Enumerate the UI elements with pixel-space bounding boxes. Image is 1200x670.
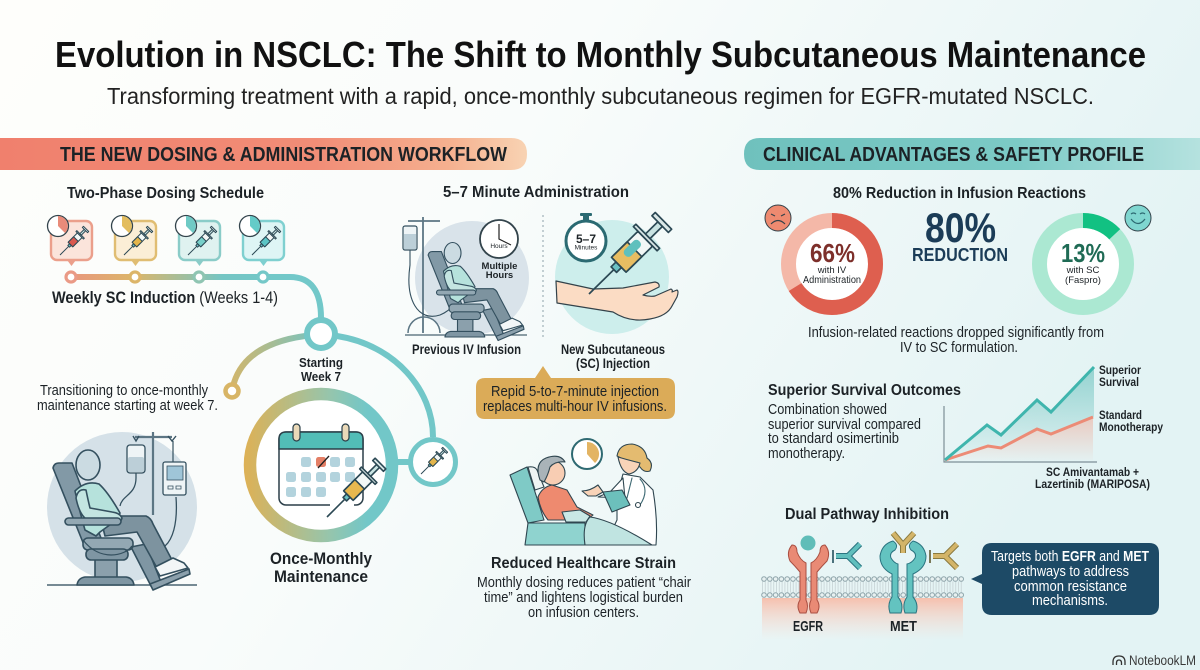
heading: two-phase dosing schedule: Two-Phase Dosing Schedule xyxy=(67,185,264,202)
text: transition note xyxy=(37,383,218,414)
heading: reduced healthcare strain: Reduced Healthcare Strain xyxy=(491,555,676,572)
label: standard monotherapy: Monotherapy xyxy=(1099,422,1164,434)
callout: rapid injection: replaces multi-hour IV infusions. xyxy=(483,399,667,415)
icon: week 4 dose card xyxy=(240,216,284,266)
panel: new dosing and administration workflow xyxy=(0,138,691,621)
stat: 80 percent reduction xyxy=(912,204,1008,265)
subtitle: Transforming treatment with a rapid, once-monthly subcutaneous regimen for EGFR-mutated NSCLC. xyxy=(107,83,1094,109)
chart: 13 percent SC donut: 13% xyxy=(1061,238,1105,268)
text: reaction summary: Infusion-related reactions dropped significantly from xyxy=(808,324,1104,341)
panel heading: workflow xyxy=(0,138,527,170)
label: once-monthly maintenance: Maintenance xyxy=(274,567,368,586)
stat: 80 percent reduction: 80% xyxy=(925,204,996,251)
callout: dual targeting: Targets both EGFR and MET xyxy=(991,548,1149,565)
label: chart axis regimen: Lazertinib (MARIPOSA) xyxy=(1035,477,1150,491)
callout: dual targeting xyxy=(971,543,1159,615)
label: once-monthly maintenance xyxy=(270,549,372,586)
text: survival description xyxy=(768,401,921,462)
label: starting week 7: Starting xyxy=(299,355,343,370)
panel: clinical advantages and safety profile xyxy=(744,138,1200,640)
label: superior survival: Survival xyxy=(1099,377,1139,389)
heading: superior survival outcomes: Superior Survival Outcomes xyxy=(768,382,961,399)
divider between IV and SC xyxy=(542,215,544,340)
icon: previous IV infusion illustration: Multiple xyxy=(482,261,517,272)
text: healthcare strain description: time” and lightens logistical burden xyxy=(484,589,683,606)
chart: 66 percent IV donut xyxy=(788,220,876,308)
icon: week 3 dose card xyxy=(176,216,220,266)
text: transition note: Transitioning to once-monthly xyxy=(40,383,209,399)
label: once-monthly maintenance: Once-Monthly xyxy=(270,549,372,568)
label: MET: MET xyxy=(890,618,917,635)
icon: previous IV infusion illustration xyxy=(403,217,529,340)
text: survival description: Combination showed xyxy=(768,401,887,418)
icon: sad face xyxy=(765,205,791,231)
chart: 13 percent SC donut: (Faspro) xyxy=(1065,275,1101,286)
text: reaction summary xyxy=(808,324,1104,356)
heading: 5-7 minute administration: 5–7 Minute Administration xyxy=(443,184,629,201)
icon: antibody bound to MET xyxy=(930,544,957,568)
icon: patient and clinician xyxy=(510,439,657,545)
panel heading: clinical advantages xyxy=(744,138,1200,170)
label: standard monotherapy xyxy=(1099,410,1164,434)
chart: 66 percent IV donut: Administration xyxy=(803,275,861,286)
icon: antibody bound to EGFR xyxy=(833,544,860,568)
label: weekly SC induction: Weekly SC Induction (Weeks 1-4) xyxy=(52,289,278,307)
icon: subcutaneous injection illustration: 5–7 xyxy=(576,232,596,246)
label: starting week 7: Week 7 xyxy=(301,369,341,384)
timeline nodes xyxy=(66,272,268,282)
text: healthcare strain description: on infusion centers. xyxy=(528,604,639,621)
label: chart axis regimen: SC Amivantamab + xyxy=(1046,465,1139,479)
chart: survival line chart xyxy=(944,367,1097,462)
label: superior survival xyxy=(1099,365,1141,389)
chart: 66 percent IV donut: with IV xyxy=(817,265,847,276)
icon: previous IV infusion illustration: Hours xyxy=(490,243,508,250)
text: survival description: to standard osimertinib xyxy=(768,430,899,447)
label: new subcutaneous injection: (SC) Injection xyxy=(576,356,650,371)
icon: happy face xyxy=(1125,205,1151,231)
diagram: cell membrane xyxy=(762,579,963,640)
label: starting week 7 xyxy=(299,355,343,384)
callout: rapid injection xyxy=(476,366,675,419)
label: standard monotherapy: Standard xyxy=(1099,410,1142,422)
text: healthcare strain description: Monthly dosing reduces patient “chair xyxy=(477,574,691,591)
heading: 80 percent reduction: 80% Reduction in Infusion Reactions xyxy=(833,185,1086,202)
heading: dual pathway inhibition: Dual Pathway Inhibition xyxy=(785,506,949,523)
panel heading: clinical advantages: CLINICAL ADVANTAGES & SAFETY PROFILE xyxy=(763,144,1144,166)
node: arc start xyxy=(226,384,238,398)
label: new subcutaneous injection xyxy=(561,342,665,371)
chart: 13 percent SC donut: with SC xyxy=(1066,265,1100,276)
chart: 13 percent SC donut xyxy=(1040,220,1126,308)
callout: rapid injection: Repid 5-to-7-minute injection xyxy=(491,384,659,400)
label: superior survival: Superior xyxy=(1099,365,1141,377)
icon: subcutaneous injection illustration: Minutes xyxy=(575,244,598,252)
label: EGFR: EGFR xyxy=(793,618,823,635)
callout: dual targeting: mechanisms. xyxy=(1032,592,1108,609)
callout: dual targeting: pathways to address xyxy=(1012,563,1129,580)
text: transition note: maintenance starting at week 7. xyxy=(37,398,218,414)
icon: MET receptor xyxy=(880,541,926,613)
icon: small syringe node xyxy=(410,440,456,484)
text: healthcare strain description xyxy=(477,574,691,621)
stat: 80 percent reduction: REDUCTION xyxy=(912,244,1008,265)
icon: week 2 dose card xyxy=(112,216,156,266)
icon: EGFR receptor xyxy=(788,536,829,613)
text: reaction summary: IV to SC formulation. xyxy=(900,339,1018,356)
chart: 66 percent IV donut: 66% xyxy=(810,238,855,268)
timeline connector to monthly arc xyxy=(65,277,433,462)
icon: subcutaneous injection illustration xyxy=(555,209,678,334)
icon: ligand on MET xyxy=(893,533,914,553)
panel heading: workflow: THE NEW DOSING & ADMINISTRATION WORKFLOW xyxy=(60,144,507,166)
text: survival description: superior survival compared xyxy=(768,416,921,433)
label: chart axis regimen xyxy=(1035,465,1150,491)
icon: monthly maintenance calendar ring xyxy=(250,394,392,536)
icon: previous IV infusion illustration: Hours xyxy=(486,270,513,281)
label: new subcutaneous injection: New Subcutaneous xyxy=(561,342,665,357)
icon: week 1 dose card xyxy=(48,216,92,266)
text: survival description: monotherapy. xyxy=(768,445,845,462)
label: previous IV infusion: Previous IV Infusion xyxy=(412,342,521,357)
node: week 7 transition xyxy=(307,320,335,348)
icon: patient in infusion chair with pump xyxy=(47,432,197,590)
callout: dual targeting: common resistance xyxy=(1014,578,1127,595)
